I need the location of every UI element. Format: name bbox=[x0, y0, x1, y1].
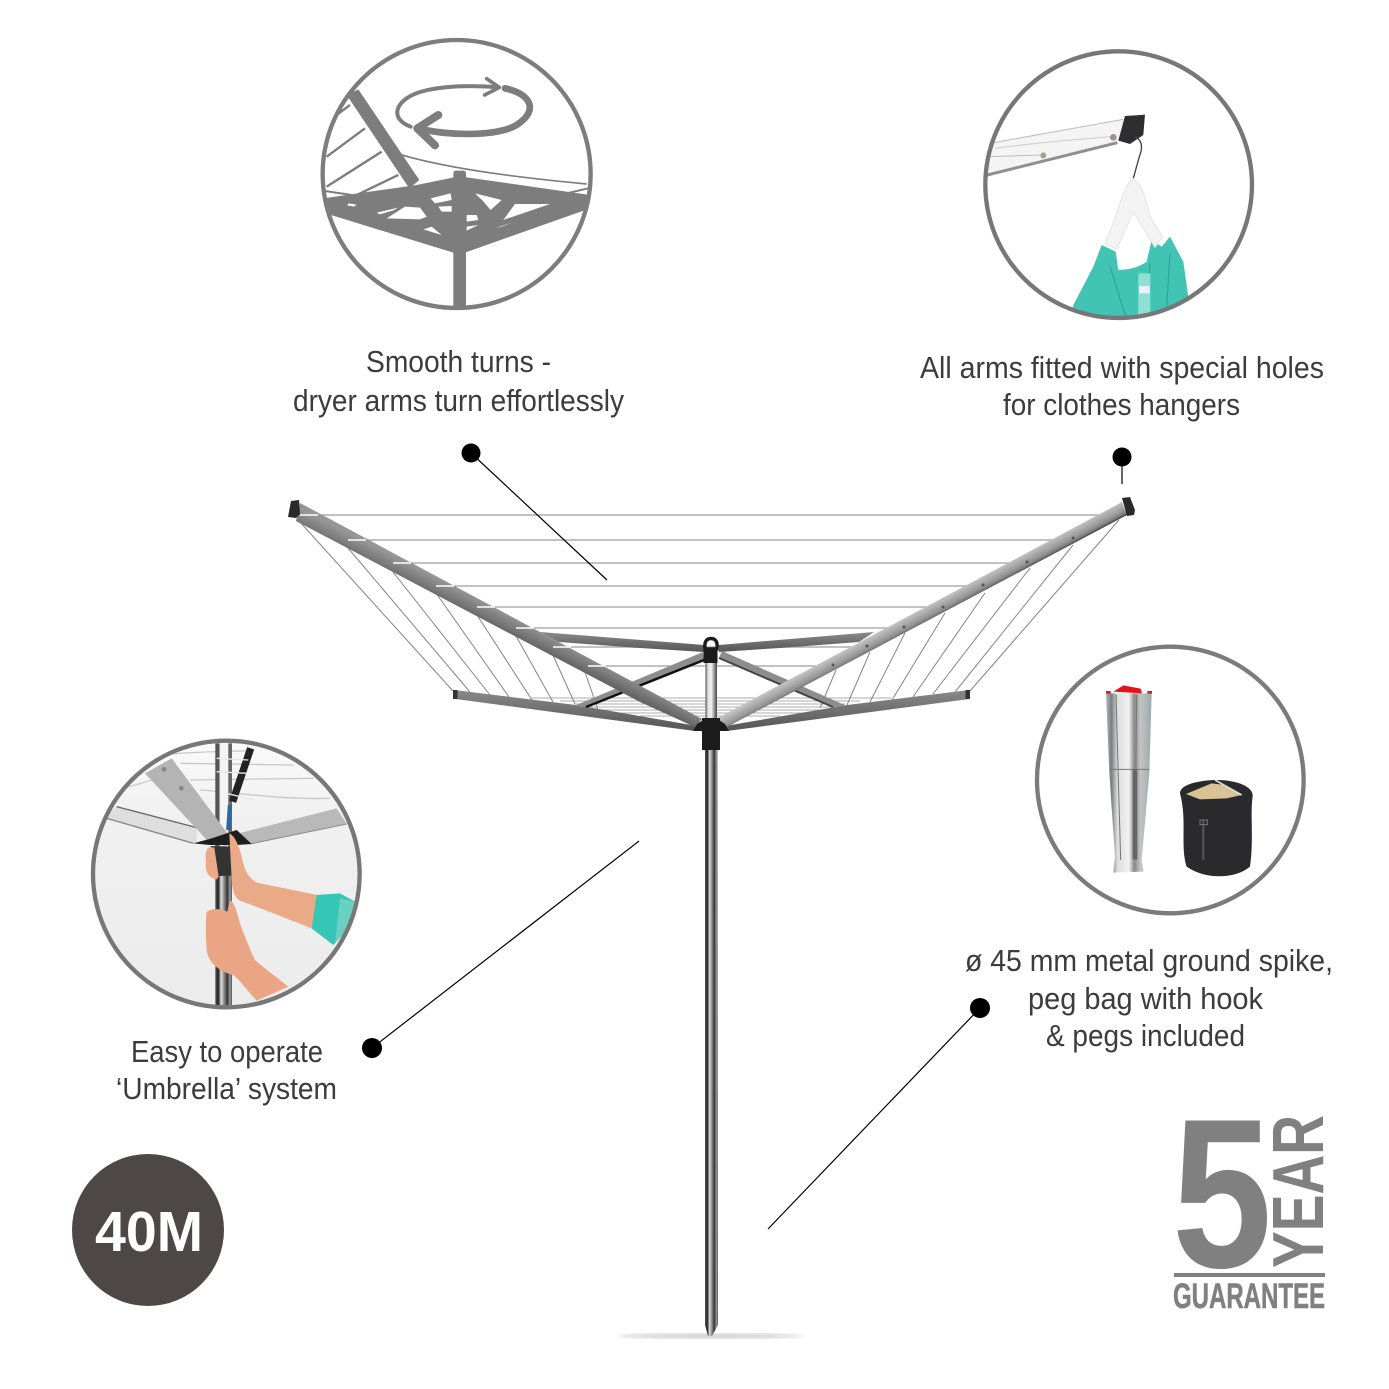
handle bbox=[193, 830, 252, 876]
pole bbox=[215, 743, 253, 1007]
hub top bbox=[693, 638, 729, 750]
callout: umbrella system pointer bbox=[362, 841, 639, 1058]
callout: hanger holes pointer bbox=[1112, 448, 1132, 484]
hands and sleeve bbox=[206, 833, 317, 1001]
callout: ground spike pointer bbox=[768, 998, 990, 1229]
badge: 40M line length bbox=[72, 1154, 224, 1306]
caption: ground spike and pegs: ø 45 mm metal ground spike, bbox=[965, 943, 1333, 978]
rear arms bbox=[453, 690, 970, 731]
caption: hanger holes bbox=[920, 350, 1324, 422]
line highlights on arms bbox=[300, 515, 606, 666]
near arm bbox=[145, 758, 230, 846]
badge: 5 year guarantee: 5 bbox=[1172, 1075, 1272, 1313]
pole bbox=[705, 745, 718, 1336]
caption: smooth turns: Smooth turns - bbox=[366, 344, 551, 379]
main arms bbox=[296, 502, 1127, 727]
arm end caps bbox=[288, 497, 1135, 518]
caption: umbrella system bbox=[116, 1034, 337, 1106]
arm screws bbox=[832, 536, 1074, 666]
badge: 5 year guarantee: GUARANTEE bbox=[1173, 1277, 1325, 1316]
icon: umbrella operation hands circle bbox=[93, 741, 360, 1007]
caption: ground spike and pegs: peg bag with hook bbox=[1028, 981, 1263, 1016]
icon: ground spike and peg bag circle bbox=[1037, 647, 1304, 913]
callout: smooth turns pointer bbox=[462, 444, 607, 580]
struts bbox=[574, 651, 847, 707]
peg bag bbox=[1180, 780, 1253, 876]
rotary dryer product bbox=[288, 497, 1135, 1338]
caption: ground spike and pegs: & pegs included bbox=[1046, 1018, 1245, 1053]
caption: umbrella system: Easy to operate bbox=[131, 1034, 323, 1069]
caption: smooth turns bbox=[293, 344, 624, 418]
caption: smooth turns: dryer arms turn effortlessly bbox=[293, 383, 624, 418]
shirt bbox=[1070, 237, 1188, 320]
dryer arm end bbox=[983, 115, 1145, 178]
ground spike bbox=[1106, 685, 1152, 873]
caption: hanger holes: for clothes hangers bbox=[1003, 387, 1240, 422]
badge: 40M line length: 40M bbox=[95, 1200, 203, 1264]
hanger bbox=[1105, 179, 1163, 249]
washing lines bbox=[300, 515, 1122, 716]
badge: 5 year guarantee: YEAR bbox=[1259, 1115, 1339, 1268]
upper arms bbox=[540, 632, 874, 652]
caption: hanger holes: All arms fitted with special holes bbox=[920, 350, 1324, 385]
rear arms bbox=[105, 807, 347, 844]
caption: ground spike and pegs bbox=[965, 943, 1333, 1053]
icon: hanger hooked on arm circle bbox=[983, 51, 1252, 320]
caption: umbrella system: ‘Umbrella’ system bbox=[116, 1071, 337, 1106]
icon: rotation pictogram circle bbox=[323, 40, 591, 308]
